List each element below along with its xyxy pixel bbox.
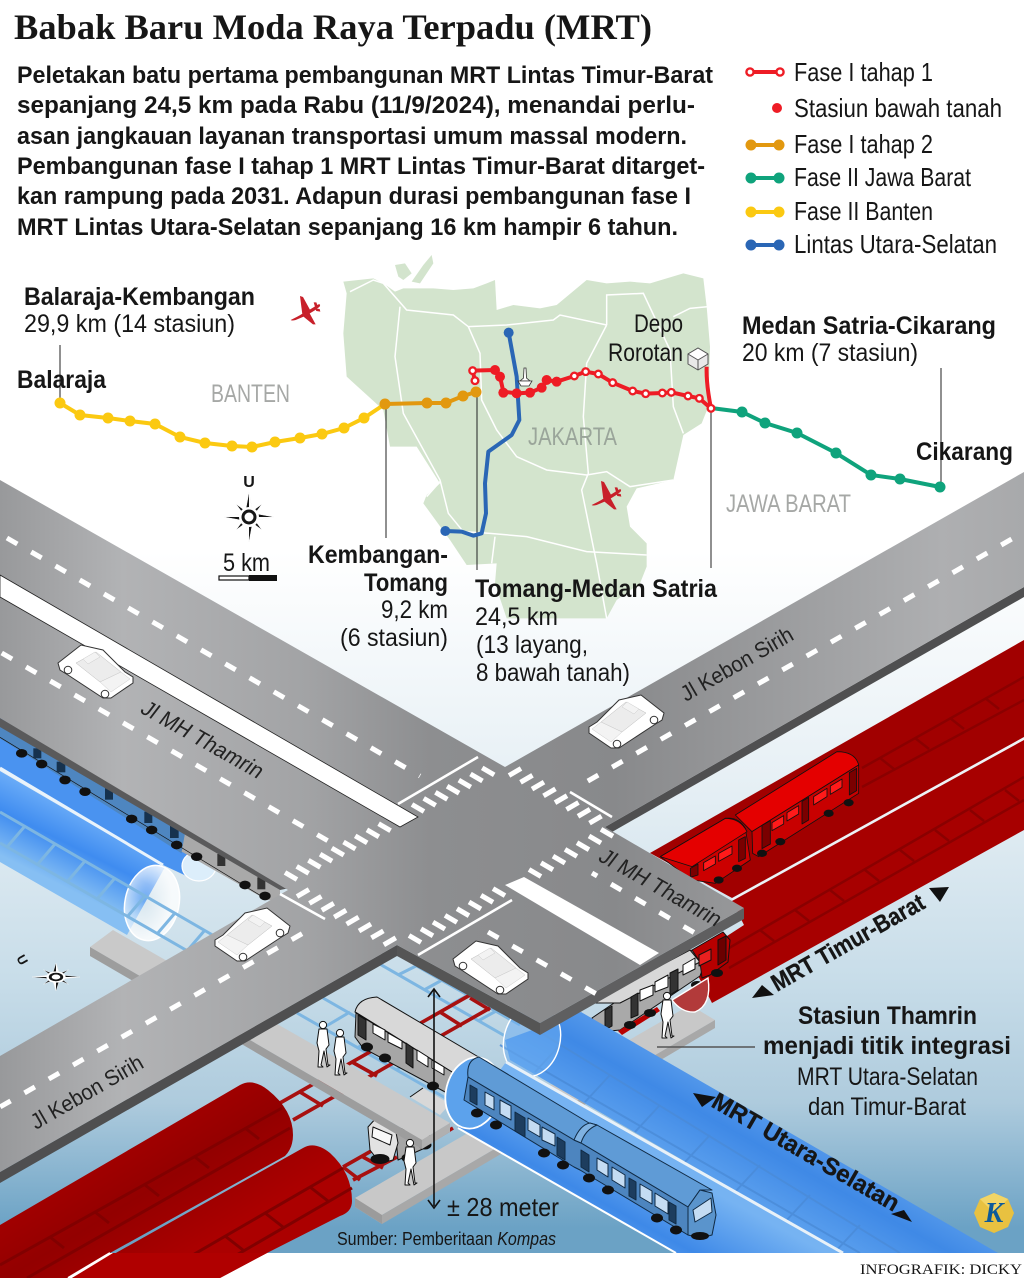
red train Timur-Barat	[660, 752, 859, 884]
label: Tomang-Medan Satria: 24,5 km	[475, 603, 558, 631]
label: Depo Rorotan: Depo	[634, 310, 683, 338]
road label: Jl Kebon Sirih south-west: Jl Kebon Sirih	[26, 1050, 148, 1134]
stop lines	[280, 757, 612, 955]
passengers on platforms	[317, 992, 674, 1185]
intro text block: sepanjang 24,5 km pada Rabu (11/9/2024), menandai perlu-	[17, 92, 695, 119]
label: Balaraja-Kembangan: Balaraja-Kembangan	[24, 283, 255, 311]
route: Lintas Utara-Selatan	[440, 328, 519, 536]
platform Timur-Barat	[355, 1005, 715, 1224]
road median SE	[505, 877, 659, 965]
blue train Utara-Selatan	[464, 1057, 716, 1240]
label: Medan Satria-Cikarang: 20 km (7 stasiun)	[742, 339, 918, 367]
label: MRT Timur-Barat with arrows: MRT Timur-Barat	[767, 889, 930, 997]
glass end upper left tunnel	[182, 851, 216, 881]
label: Balaraja-Kembangan: 29,9 km (14 stasiun)	[24, 310, 235, 338]
road label: Jl Kebon Sirih north-east: Jl Kebon Sirih	[676, 622, 798, 706]
map region label: JAWA BARAT: JAWA BARAT	[726, 490, 851, 518]
route: Fase II Banten	[54, 398, 385, 452]
legend: Lintas Utara-Selatan: Lintas Utara-Selatan	[794, 229, 997, 259]
glass end red tunnel right	[672, 978, 709, 1012]
legend: Fase II Banten	[746, 196, 933, 226]
callout: Stasiun Thamrin	[763, 1002, 1011, 1121]
callout: Stasiun Thamrin: menjadi titik integrasi	[763, 1032, 1011, 1060]
label: Tomang-Medan Satria	[475, 575, 718, 687]
label: Kembangan-Tomang: 9,2 km	[381, 596, 448, 624]
depth label: ± 28 meter	[447, 1192, 559, 1222]
platform end block	[410, 1088, 450, 1115]
lane dashes	[0, 532, 1024, 1107]
icon: Monas monument	[518, 368, 532, 386]
label: Kembangan-Tomang: Kembangan-	[308, 541, 448, 569]
glass end lower south-east tunnel	[438, 1052, 508, 1134]
source line: Sumber: Pemberitaan Kompas	[337, 1229, 556, 1249]
label: Medan Satria-Cikarang: Medan Satria-Cikarang	[742, 312, 996, 340]
Kompas logo: K	[984, 1198, 1006, 1229]
white footer strip	[0, 1253, 1024, 1278]
intro text block: MRT Lintas Utara-Selatan sepanjang 16 km hampir 6 tahun.	[17, 214, 678, 241]
route: Fase I tahap 1	[469, 365, 714, 412]
road intersection	[0, 472, 1024, 1183]
label: Depo Rorotan	[608, 310, 683, 367]
label: Kembangan-Tomang: (6 stasiun)	[340, 624, 448, 652]
label: Balaraja-Kembangan	[24, 283, 255, 338]
crosswalks	[285, 768, 613, 945]
icon: airplane Jakarta	[592, 481, 621, 509]
intro text block: kan rampung pada 2031. Adapun durasi pembangunan fase I	[17, 183, 691, 210]
intro text block: Pembangunan fase I tahap 1 MRT Lintas Timur-Barat ditarget-	[17, 153, 705, 180]
legend	[746, 57, 1002, 259]
blue tunnel lower south-east	[458, 1062, 843, 1253]
icon: north compass	[224, 474, 274, 542]
car on Thamrin north-west	[58, 645, 133, 698]
legend: Fase II Banten: Fase II Banten	[794, 196, 933, 226]
light blue tracks	[0, 812, 520, 1112]
road label: Jl MH Thamrin south-east: Jl MH Thamrin	[594, 844, 728, 931]
red tracks centre	[280, 995, 490, 1180]
compass letter U: U	[13, 952, 31, 968]
red tunnel footer overlap	[72, 1253, 267, 1278]
intro text block	[17, 62, 713, 241]
label: Medan Satria-Cikarang	[742, 312, 996, 367]
map region label: JAKARTA: JAKARTA	[528, 423, 617, 451]
callout: Stasiun Thamrin: dan Timur-Barat	[808, 1093, 966, 1121]
icon: airplane Banten	[291, 296, 320, 324]
gray train right car under road	[590, 932, 730, 1035]
car on Thamrin south-east	[453, 941, 528, 994]
leader line to station	[657, 1046, 755, 1048]
blue tunnel: Utara-Selatan north-west	[0, 700, 275, 935]
legend: Fase I tahap 2	[746, 129, 933, 159]
vertical depth arrow	[428, 989, 440, 1208]
callout: Stasiun Thamrin: MRT Utara-Selatan	[797, 1063, 978, 1091]
road median NW	[0, 575, 418, 827]
legend: Fase I tahap 1: Fase I tahap 1	[794, 57, 933, 87]
icon: north compass: U	[243, 474, 255, 491]
intro text block: asan jangkauan layanan transportasi umum massal modern.	[17, 123, 687, 150]
label: Cikarang: Cikarang	[916, 438, 1013, 466]
car on Kebon Sirih south-west	[215, 908, 290, 961]
legend: Fase II Jawa Barat: Fase II Jawa Barat	[794, 162, 972, 192]
legend: Fase II Jawa Barat	[746, 162, 972, 192]
red tracks outside tunnel 2	[153, 1168, 352, 1278]
label: MRT Utara-Selatan with arrows: MRT Utara-Selatan	[707, 1088, 904, 1217]
label: Kembangan-Tomang	[308, 541, 448, 652]
white highlight line between red tunnels	[68, 1253, 110, 1278]
icon: depot box	[688, 348, 708, 370]
red tracks outside tunnel 1	[0, 1108, 290, 1278]
credit line: INFOGRAFIK: DICKY	[860, 1262, 1022, 1278]
map: Jakarta land area	[343, 255, 710, 618]
label: Tomang-Medan Satria: (13 layang,	[476, 631, 588, 659]
label: Tomang-Medan Satria: Tomang-Medan Satria	[475, 575, 718, 603]
leader lines for map labels	[60, 345, 941, 570]
gray train front car	[368, 1117, 432, 1164]
callout: Stasiun Thamrin: Stasiun Thamrin	[798, 1002, 977, 1030]
label: Depo Rorotan: Rorotan	[608, 339, 683, 367]
title: Babak Baru Moda Raya Terpadu (MRT)	[14, 7, 652, 47]
glass end upper south-east tunnel	[496, 997, 568, 1083]
route: Fase II Jawa Barat	[711, 406, 946, 492]
left train under Jl MH Thamrin	[0, 727, 280, 901]
intro text block: Peletakan batu pertama pembangunan MRT Lintas Timur-Barat	[17, 62, 713, 89]
platform Utara-Selatan	[90, 930, 450, 1149]
gray train back car	[355, 997, 487, 1102]
road label: Jl MH Thamrin north-west: Jl MH Thamrin	[136, 696, 270, 783]
scale bar 5 km: 5 km	[223, 549, 270, 577]
map region label: BANTEN: BANTEN	[211, 380, 290, 408]
glass end lower left tunnel	[118, 860, 186, 946]
label: Tomang-Medan Satria: 8 bawah tanah)	[476, 659, 630, 687]
label: Balaraja: Balaraja	[17, 366, 107, 394]
Kompas logo	[974, 1193, 1014, 1233]
red tunnel bottom-left 1	[0, 1082, 293, 1278]
red tunnel: Timur-Barat north-east	[650, 640, 1024, 1003]
legend: Fase I tahap 1	[746, 57, 933, 87]
legend: Fase I tahap 2: Fase I tahap 2	[794, 129, 933, 159]
blue tunnel upper south-east	[500, 1012, 998, 1253]
car on Kebon Sirih north-east	[589, 695, 664, 748]
route: Fase I tahap 2	[380, 386, 482, 410]
label: Kembangan-Tomang: Tomang	[364, 569, 448, 597]
small compass	[32, 963, 80, 991]
red tunnel bottom-left 2	[72, 1145, 352, 1278]
